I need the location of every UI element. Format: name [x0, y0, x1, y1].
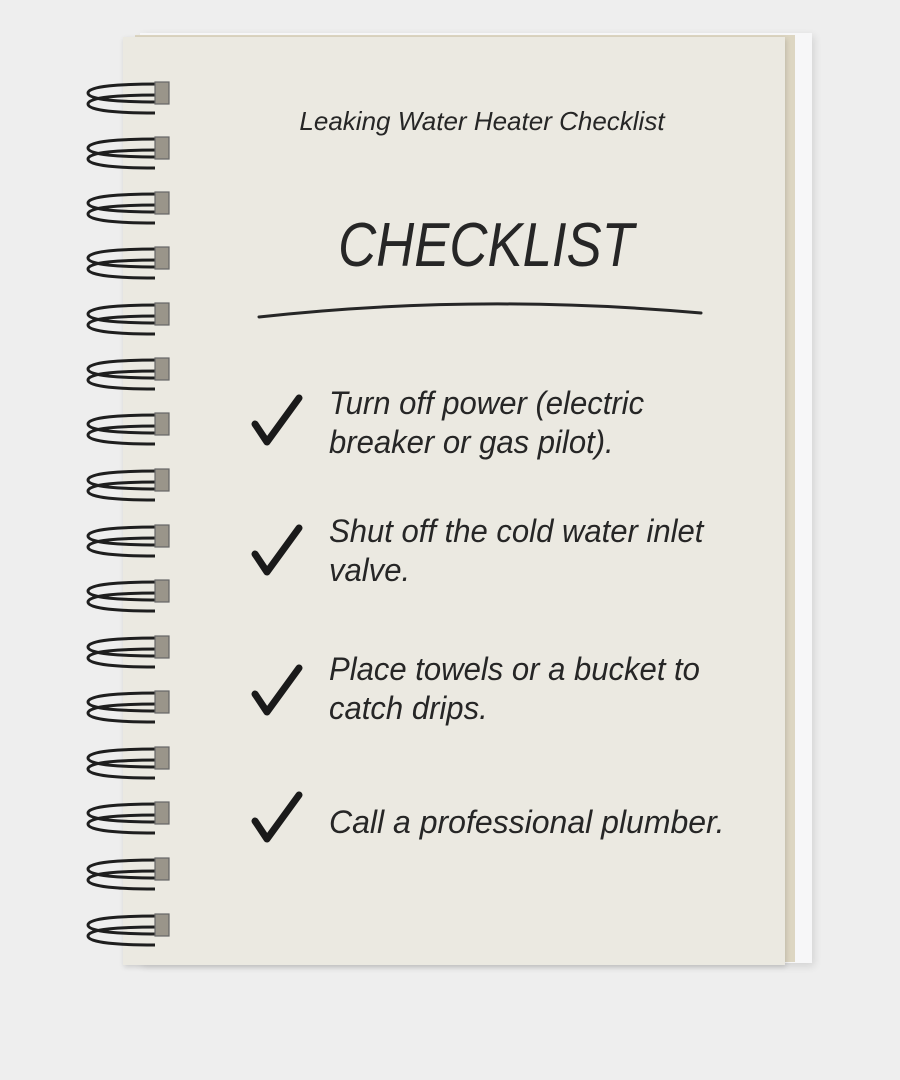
text: catch drips. — [329, 690, 488, 726]
text: Call a professional plumber. — [329, 804, 724, 840]
text — [329, 651, 700, 726]
icon: check — [252, 394, 302, 446]
item 1 — [252, 385, 644, 460]
text: Shut off the cold water inlet — [329, 513, 703, 549]
checklist items — [252, 385, 724, 842]
icon: check — [252, 524, 302, 576]
text — [329, 513, 704, 588]
text: Turn off power (electric — [329, 385, 644, 421]
icon: check — [252, 664, 302, 716]
subtitle: Leaking Water Heater Checklist — [299, 106, 665, 136]
item 2 — [252, 513, 704, 588]
icon: check — [252, 792, 302, 842]
item 3 — [252, 651, 700, 726]
spiral binding — [86, 81, 170, 946]
notebook back cover — [140, 33, 812, 963]
text: breaker or gas pilot). — [329, 424, 614, 460]
item 4 — [252, 792, 724, 842]
title: CHECKLIST — [338, 211, 634, 280]
page edges — [135, 35, 795, 962]
text: valve. — [329, 552, 410, 588]
notebook page — [123, 37, 785, 965]
text — [329, 385, 644, 460]
title underline — [258, 302, 702, 318]
text: Place towels or a bucket to — [329, 651, 700, 687]
